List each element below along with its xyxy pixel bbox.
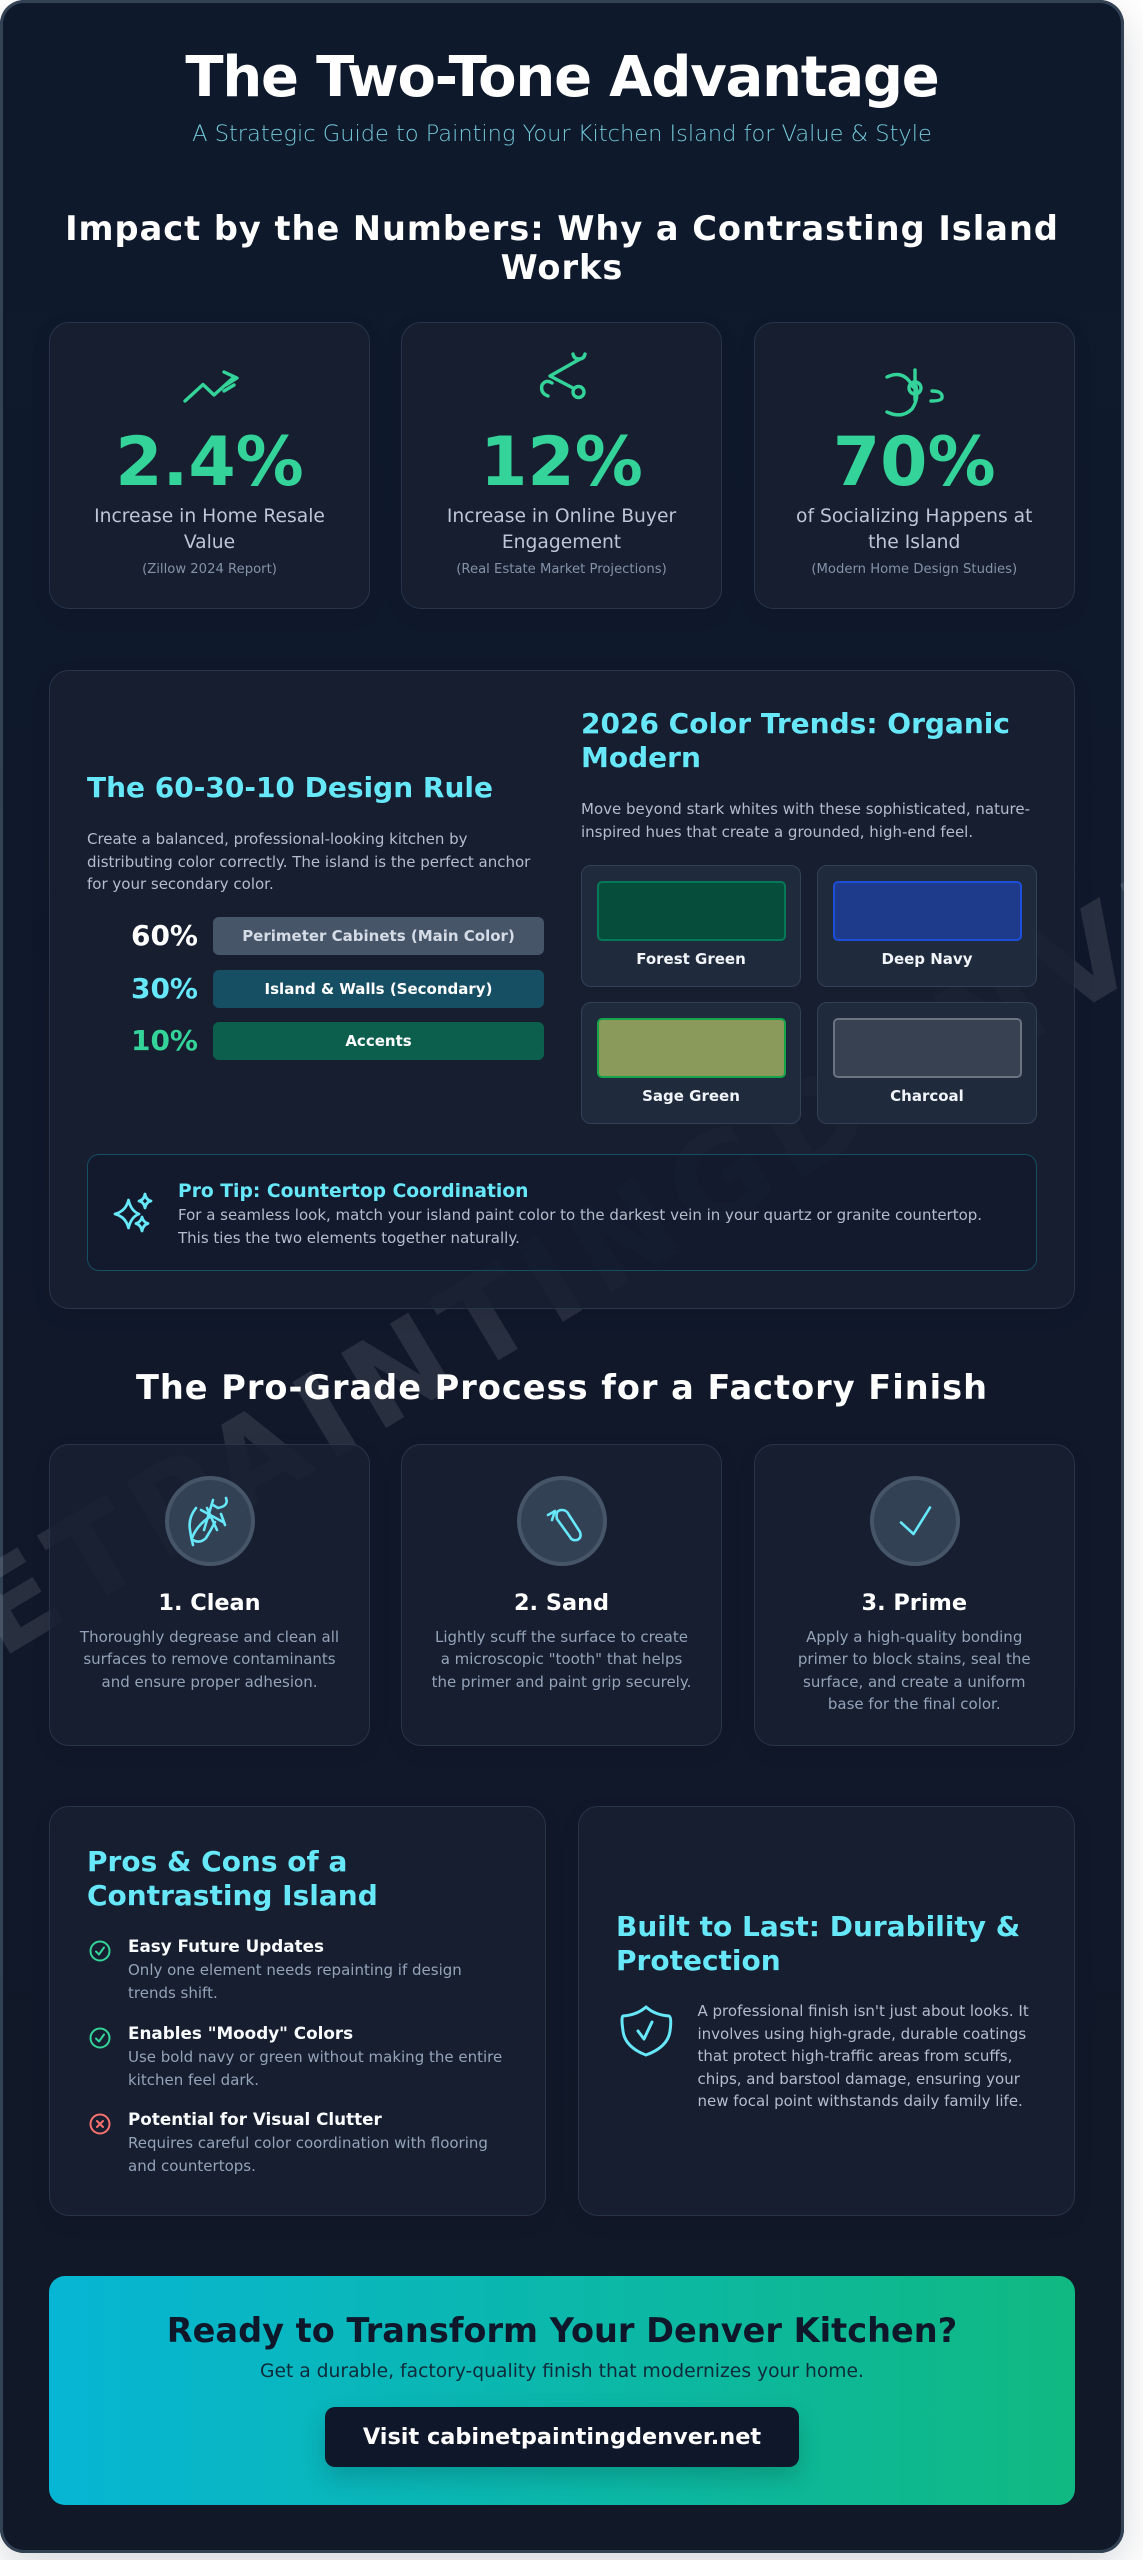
- stat value: 70%: [833, 423, 996, 502]
- item title: Easy Future Updates: [128, 1936, 324, 1956]
- heading: impact by the numbers: Works: [501, 248, 623, 286]
- step text: a microscopic "tooth" that helps: [441, 1650, 682, 1668]
- text: rule description: for your secondary color.: [87, 875, 274, 893]
- step title: 3. Prime: [861, 1590, 967, 1616]
- icon: trending up: [183, 370, 239, 403]
- heading: color trends: 2026 Color Trends: Organic: [581, 707, 1010, 740]
- icon: x circle: [90, 2114, 110, 2134]
- bar: perimeter cabinets: Perimeter Cabinets (Main Color): [242, 927, 515, 945]
- label: 10%: 10%: [131, 1024, 198, 1057]
- icon: sparkles: [114, 1192, 152, 1232]
- step text: the primer and paint grip securely.: [432, 1672, 691, 1690]
- stat value: 12%: [480, 423, 643, 502]
- step text: [798, 1628, 1031, 1713]
- item title: Potential for Visual Clutter: [128, 2109, 382, 2129]
- heading: impact by the numbers: Impact by the Numbers: Why a Contrasting Island: [65, 209, 1059, 248]
- panel: step 3 prime: [754, 1444, 1075, 1746]
- bar: island and walls: [213, 970, 544, 1008]
- panel: durability: [578, 1806, 1075, 2216]
- step text: Apply a high-quality bonding: [806, 1628, 1022, 1646]
- text: durability description: [698, 2002, 1029, 2110]
- item text: kitchen feel dark.: [128, 2070, 259, 2088]
- swatch: forest green: Forest Green: [636, 950, 746, 968]
- callout: pro tip: [87, 1154, 1037, 1271]
- step text: surface, and create a uniform: [803, 1672, 1025, 1690]
- swatch: charcoal: Charcoal: [890, 1087, 964, 1105]
- panel: stat 12%: [401, 322, 722, 609]
- icon: share nodes: [540, 352, 587, 400]
- stat value: 2.4%: [115, 423, 304, 502]
- item text: [128, 2134, 488, 2174]
- panel: design rule and color trends: [49, 670, 1075, 1309]
- panel: step 1 clean: [49, 1444, 370, 1746]
- stat source: (Real Estate Market Projections): [456, 562, 667, 577]
- step title: 2. Sand: [514, 1590, 609, 1616]
- step text: [432, 1628, 691, 1690]
- panel: stat 2.4%: [49, 322, 370, 609]
- list item: moody colors: [90, 2023, 502, 2088]
- label: 60%: 60%: [131, 919, 198, 952]
- stat label: [94, 506, 325, 553]
- bar: perimeter cabinets: [213, 917, 544, 955]
- text: trends description: [581, 800, 1030, 840]
- step text: and ensure proper adhesion.: [102, 1672, 317, 1690]
- stat label: the Island: [868, 532, 960, 553]
- heading: pros and cons: Contrasting Island: [87, 1879, 378, 1912]
- step text: primer to block stains, seal the: [798, 1650, 1031, 1668]
- swatch: sage green: [581, 1002, 801, 1124]
- item text: Requires careful color coordination with flooring: [128, 2134, 488, 2152]
- heading: 60-30-10 rule: The 60-30-10 Design Rule: [87, 771, 493, 804]
- cta heading: Ready to Transform Your Denver Kitchen?: [167, 2311, 957, 2350]
- stat label: [447, 506, 676, 553]
- cta button: [325, 2407, 799, 2467]
- text: rule description: [87, 830, 530, 893]
- stat label: of Socializing Happens at: [796, 506, 1032, 527]
- step text: Lightly scuff the surface to create: [435, 1628, 688, 1646]
- heading: process: The Pro-Grade Process for a Factory Finish: [136, 1368, 988, 1407]
- title: The Two-Tone Advantage: [185, 45, 939, 110]
- icon: socializing: [885, 368, 944, 417]
- subtitle: A Strategic Guide to Painting Your Kitchen Island for Value & Style: [192, 121, 932, 147]
- cta button: Visit cabinetpaintingdenver.net: [363, 2424, 761, 2450]
- text: durability description: new focal point withstands daily family life.: [698, 2092, 1023, 2110]
- cta text: Get a durable, factory-quality finish that modernizes your home.: [260, 2361, 864, 2382]
- tip text: For a seamless look, match your island paint color to the darkest vein in your quartz or granite countertop.: [178, 1206, 982, 1224]
- icon: check circle: [90, 2028, 110, 2048]
- panel: step 2 sand: [401, 1444, 722, 1746]
- swatch: forest green: [581, 865, 801, 987]
- item text: and countertops.: [128, 2156, 256, 2174]
- icon: check mark: [870, 1476, 960, 1566]
- text: durability description: chips, and barstool damage, ensuring your: [698, 2070, 1020, 2088]
- swatch: deep navy: Deep Navy: [882, 950, 972, 968]
- icon: check circle: [90, 1940, 110, 1962]
- item text: [128, 1961, 462, 2002]
- list item: easy future updates: [90, 1936, 462, 2002]
- heading: built to last: Built to Last: Durability &: [616, 1910, 1020, 1943]
- tip title: Pro Tip: Countertop Coordination: [178, 1181, 528, 1202]
- item text: Use bold navy or green without making the entire: [128, 2048, 502, 2066]
- text: rule description: distributing color correctly. The island is the perfect anchor: [87, 852, 530, 870]
- heading: pros and cons: [87, 1845, 378, 1912]
- heading: pros and cons: Pros & Cons of a: [87, 1845, 347, 1878]
- step text: Thoroughly degrease and clean all: [80, 1628, 339, 1646]
- panel: pros and cons: [49, 1806, 546, 2216]
- bar: island and walls: Island & Walls (Secondary): [265, 980, 492, 998]
- tip text: [178, 1206, 982, 1246]
- list item: visual clutter: [90, 2109, 488, 2174]
- bar: accents: Accents: [345, 1032, 412, 1050]
- heading: color trends: Modern: [581, 741, 701, 774]
- text: durability description: that protect high-traffic areas from scuffs,: [698, 2047, 1012, 2065]
- step title: 1. Clean: [158, 1590, 261, 1616]
- icon: sanding tool: [517, 1476, 607, 1566]
- label: 30%: 30%: [131, 972, 198, 1005]
- heading: built to last: [616, 1910, 1020, 1977]
- item title: Enables "Moody" Colors: [128, 2023, 353, 2043]
- icon: shield check: [620, 2005, 672, 2056]
- stat label: Value: [184, 532, 235, 553]
- tip text: This ties the two elements together naturally.: [178, 1228, 520, 1246]
- swatch: charcoal: [817, 1002, 1037, 1124]
- item text: Only one element needs repainting if design: [128, 1961, 462, 1979]
- text: trends description: inspired hues that create a grounded, high-end feel.: [581, 822, 973, 840]
- heading: built to last: Protection: [616, 1944, 781, 1977]
- item text: trends shift.: [128, 1984, 218, 2002]
- panel: call to action: [49, 2276, 1075, 2505]
- swatch: sage green: Sage Green: [642, 1087, 740, 1105]
- heading: impact by the numbers: [65, 209, 1059, 286]
- text: durability description: A professional finish isn't just about looks. It: [698, 2002, 1029, 2020]
- panel: stat 70%: [754, 322, 1075, 609]
- stat source: (Modern Home Design Studies): [811, 562, 1017, 577]
- stat label: Increase in Online Buyer: [447, 506, 676, 527]
- stat label: [796, 506, 1032, 553]
- swatch: deep navy: [817, 865, 1037, 987]
- text: durability description: involves using high-grade, durable coatings: [698, 2024, 1026, 2042]
- heading: color trends: [581, 707, 1010, 774]
- stat label: Increase in Home Resale: [94, 506, 325, 527]
- bar: accents: [213, 1022, 544, 1060]
- icon: clean brush: [165, 1476, 255, 1566]
- step text: surfaces to remove contaminants: [83, 1650, 336, 1668]
- item text: [128, 2048, 502, 2088]
- stat source: (Zillow 2024 Report): [142, 562, 277, 577]
- stat label: Engagement: [502, 532, 621, 553]
- step text: [80, 1628, 339, 1690]
- step text: base for the final color.: [828, 1695, 1001, 1713]
- text: trends description: Move beyond stark whites with these sophisticated, nature-: [581, 800, 1030, 818]
- text: rule description: Create a balanced, professional-looking kitchen by: [87, 830, 468, 848]
